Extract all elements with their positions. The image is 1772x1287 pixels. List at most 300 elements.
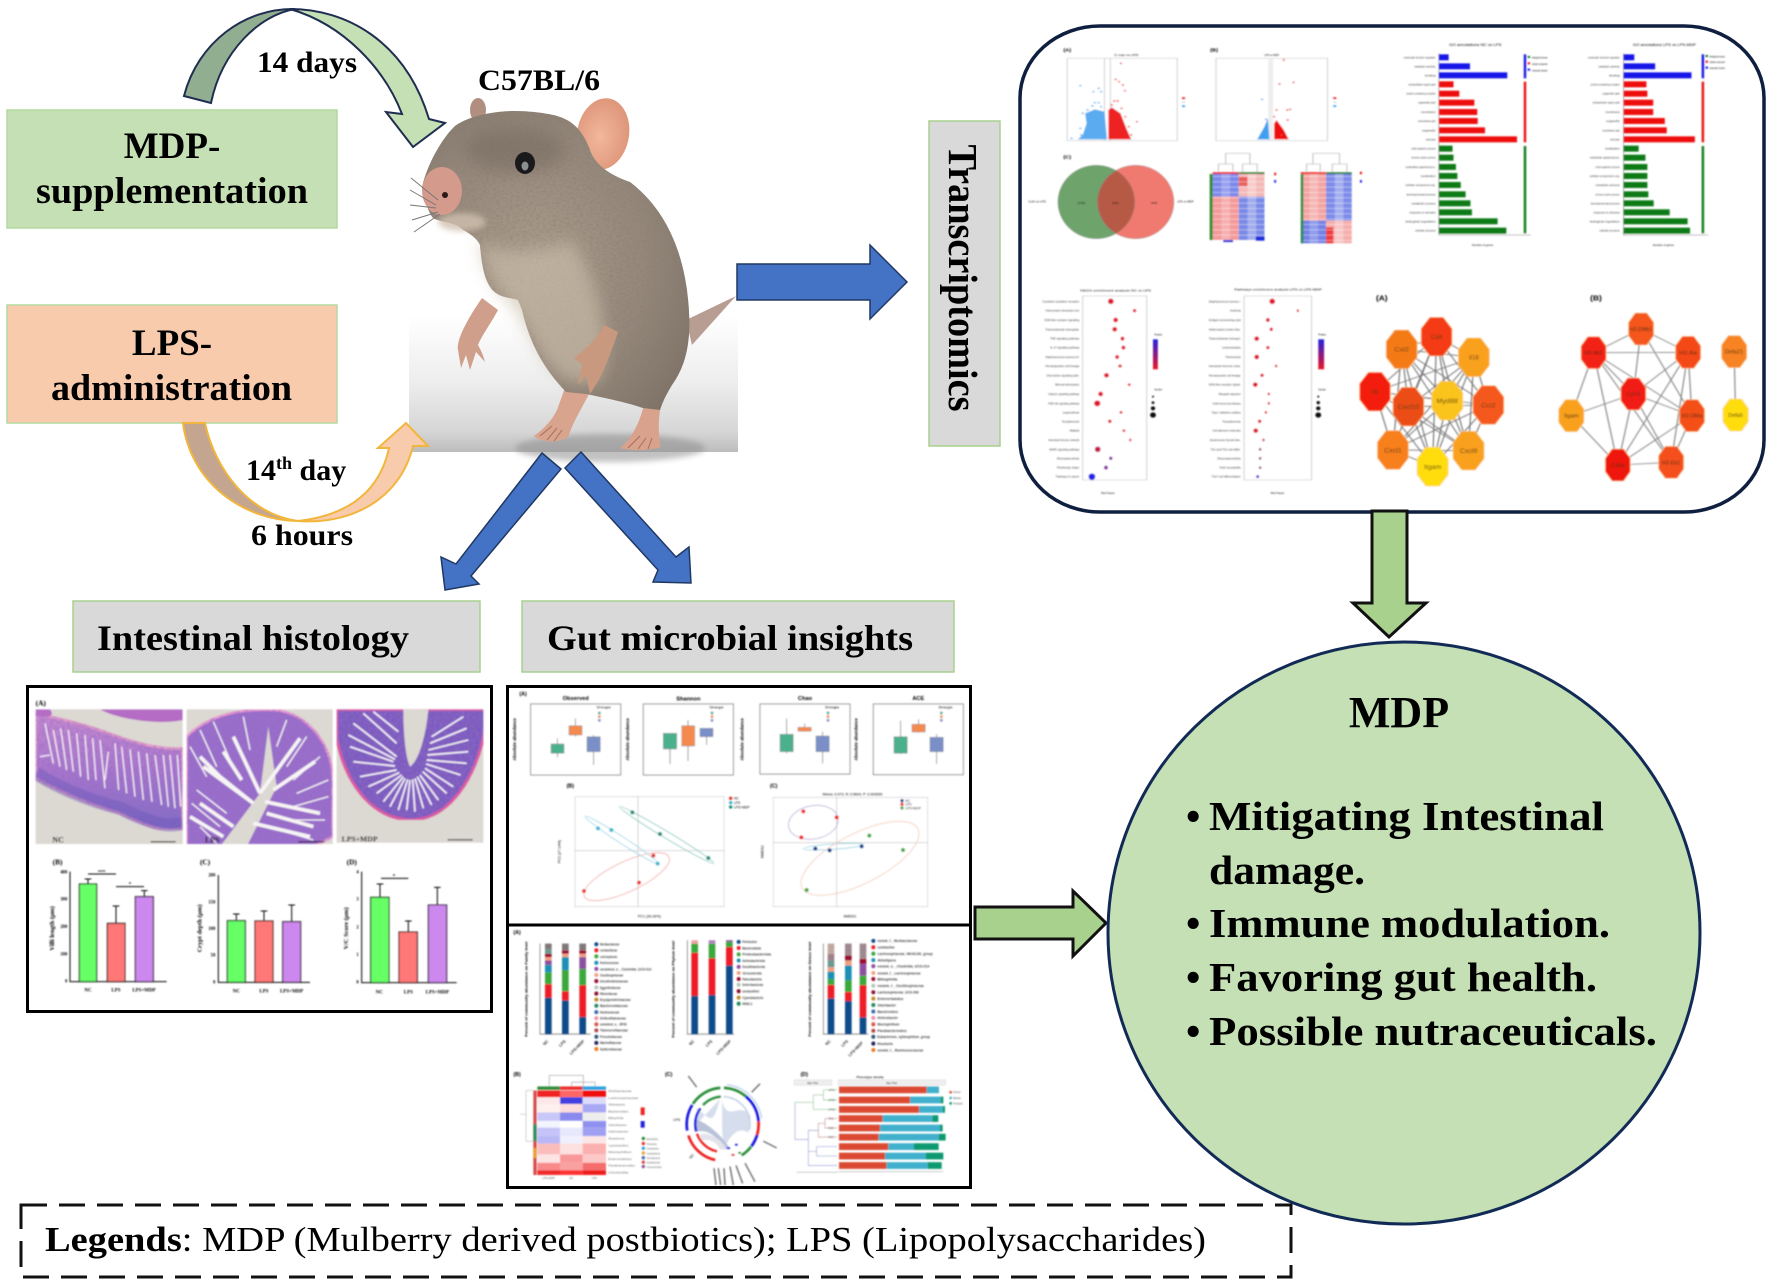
PCoA plot B: (B) (567, 783, 574, 789)
horizontal stacked bars D: Bar Plot (886, 1081, 897, 1085)
dot plot: KEGG enrichment NC vs LPS: Chemokine signaling path. (1046, 374, 1079, 377)
stacked bars: family level: Lactobacillaceae (600, 949, 617, 953)
box: Transcriptomics label: Transcriptomics (940, 144, 986, 412)
stacked bars: phylum level: Verrucomicrobia (742, 971, 762, 975)
box: LPS administration (7, 305, 337, 423)
heading box: Intestinal histology (73, 601, 480, 672)
dot plot: KEGG enrichment NC vs LPS: Staphylococcus aureus inf. (1045, 356, 1079, 359)
boxplot: Observed: Absolute abundance (512, 717, 517, 761)
bar chart: villi length: NC (84, 989, 92, 994)
network A: hub genes: Myd88 (1437, 397, 1458, 405)
volcano plot B: (B) (1210, 48, 1218, 53)
stacked bars: genus level: Percent of community abundance on Genus level (807, 942, 812, 1037)
bar chart: V/C score: LPS (404, 990, 413, 995)
bar chart: crypt depth (196, 857, 310, 994)
panel: transcriptomics results: cellular component (1532, 63, 1548, 66)
dot plot: KEGG enrichment NC vs LPS: Viral protein interaction w/c (1045, 309, 1080, 312)
bar chart: GO annotations NC vs LPS: cellular component org. (1406, 184, 1436, 187)
bar chart: GO annotations NC vs LPS: developmental process (1406, 193, 1436, 196)
dot plot: Pathway enrichment LPS vs LPS-MDP: Allograft rejection (1218, 393, 1241, 396)
boxplot: ACE (853, 696, 963, 775)
stacked bars: family level: unranked_o__RF39 (600, 1023, 627, 1027)
stacked bars: phylum level: Percent of community abundance on Phylum level (670, 941, 675, 1038)
bar chart: GO annotations NC vs LPS: GO annotations NC vs LPS (1449, 43, 1502, 47)
dot plot: Pathway enrichment LPS vs LPS-MDP: Intestinal immune netw. (1209, 365, 1241, 368)
bar chart: GO annotations NC vs LPS: response to stimulus (1409, 211, 1436, 214)
bar chart: GO annotations LPS vs LPS-MDP: immune system process (1596, 193, 1620, 196)
horizontal stacked bars D: Firmic. (953, 1090, 962, 1094)
stacked bars: phylum level: Bacteroidota (742, 946, 762, 950)
heading: MDP: MDP (1349, 688, 1449, 737)
network B: hub genes: (B) (1590, 294, 1602, 302)
stacked bars: phylum level: LPS (704, 1038, 714, 1048)
stacked bars: phylum level: Proteobacteriota (742, 953, 772, 957)
conclusion list: • (1186, 900, 1200, 946)
bar chart: GO annotations NC vs LPS: binding (1425, 74, 1436, 77)
stacked bars: family level: Bacteroidaceae (600, 1004, 628, 1008)
heatmap B: taxa (513, 1072, 662, 1180)
heatmap B: taxa: Cyanobacteria (647, 1151, 660, 1155)
bar chart: crypt depth: 150 (208, 900, 216, 905)
arrow: mouse to gut microbial insights (565, 452, 691, 583)
dot plot: Pathway enrichment LPS vs LPS-MDP: Cell adhesion molecules (1213, 429, 1241, 432)
arrow: transcriptomics to MDP conclusions (1353, 511, 1426, 637)
bar chart: GO annotations LPS vs LPS-MDP: biological process (1709, 55, 1725, 58)
PCoA plot B: NC (734, 797, 739, 801)
network B: hub genes: Itgam (1564, 414, 1579, 419)
bar chart: GO annotations NC vs LPS: localization (1421, 175, 1436, 178)
bar chart: GO annotations LPS vs LPS-MDP: Number of genes (1653, 244, 1674, 247)
bar chart: GO annotations LPS vs LPS-MDP: extracellular region part (1593, 101, 1620, 104)
venn diagram (1028, 155, 1194, 239)
stacked bars: genus level: NC (824, 1039, 832, 1046)
stacked bars: family level: Rikenellaceae (600, 992, 617, 996)
stacked bars: family level: LPS+MDP (568, 1038, 586, 1056)
panel: gut microbial results: (A) (513, 930, 521, 936)
bar chart: villi length: LPS (111, 989, 121, 994)
bar chart: villi length: 400 (60, 870, 68, 875)
bar chart: GO annotations LPS vs LPS-MDP: molecular function (1709, 67, 1725, 70)
horizontal stacked bars D: Bacter. (953, 1096, 962, 1100)
network A: hub genes: Il18 (1469, 353, 1479, 361)
stacked bars: genus level: Mucispirillum (877, 1023, 900, 1027)
dot plot: KEGG enrichment NC vs LPS: Pathways in cancer (1056, 475, 1080, 478)
bar chart: crypt depth: LPS+MDP (280, 989, 303, 994)
PCoA plot C: LPS+MDP (905, 806, 922, 810)
bar chart: villi length: 100 (60, 952, 68, 957)
bar chart: GO annotations NC vs LPS: catalytic activity (1414, 65, 1436, 68)
boxplot: Observed (512, 696, 621, 775)
bar chart: GO annotations LPS vs LPS-MDP: multicellular organismal proc. (1590, 156, 1620, 159)
dot plot: KEGG enrichment NC vs LPS: Cytokine-cytokine receptor (1042, 300, 1080, 303)
stacked bars: genus level: Enterorhabdus (877, 997, 903, 1001)
horizontal stacked bars D: LPS3 (828, 1107, 835, 1111)
stacked bars: genus level (807, 939, 933, 1058)
dot plot: KEGG enrichment NC vs LPS: Intestinal immune network (1048, 439, 1080, 442)
stacked bars: family level: Lachnospiraceae (600, 955, 617, 959)
heatmap B: taxa: Lachnospiraceae (608, 1096, 639, 1100)
micrograph: LPS+MDP (337, 709, 485, 843)
boxplot: Chao (739, 696, 850, 774)
micrograph: LPS+MDP: LPS+MDP (342, 834, 378, 843)
boxplot: Shannon: Groups (709, 705, 724, 710)
stacked bars: genus level: norank_f__Muribaculaceae (877, 939, 917, 943)
network B: hub genes: Ciita (1611, 463, 1625, 469)
PCoA plot C (760, 783, 929, 918)
curved arrow: LPS administration to mouse (183, 423, 428, 521)
bar chart: GO annotations NC vs LPS: immune system process (1411, 156, 1436, 159)
stacked bars: phylum level: Patescibacteria (742, 977, 762, 981)
bar chart: villi length: *** (98, 870, 106, 875)
heatmap B: taxa: Bacteroidota (647, 1137, 658, 1141)
boxplot: Observed: Observed (563, 696, 589, 702)
bar chart: GO annotations LPS vs LPS-MDP: cellular process (1599, 229, 1620, 232)
stacked bars: phylum level: Deferribacterota (742, 983, 764, 987)
bar chart: GO annotations NC vs LPS: organelle (1422, 129, 1436, 132)
dot plot: Pathway enrichment LPS vs LPS-MDP: Leishmaniasis (1222, 346, 1241, 349)
stacked bars: genus level: Eubacterium_xylanophilum_group (877, 1035, 931, 1039)
bar chart: GO annotations NC vs LPS (1404, 43, 1548, 247)
stacked bars: genus level: LPS (840, 1038, 849, 1048)
bar chart: V/C score: * (393, 874, 396, 879)
heatmap B: taxa: Actinobacteria (647, 1156, 660, 1160)
stacked bars: phylum level (670, 940, 772, 1056)
micrograph: LPS (187, 709, 333, 847)
heatmap B: taxa: Desulfobacterota (647, 1160, 660, 1164)
stacked bars: genus level: Parabacteroides (877, 1029, 907, 1033)
dot plot: Pathway enrichment LPS vs LPS-MDP: Autoimmune thyroid dise. (1210, 439, 1241, 442)
PCoA plot B: LPS+MDP (734, 805, 750, 809)
stacked bars: family level: Nostocaceae (600, 1010, 619, 1015)
horizontal stacked bars D: Proteob. (953, 1101, 964, 1105)
heatmap B: taxa: Bilophila (608, 1116, 624, 1120)
bar chart: GO annotations LPS vs LPS-MDP: response to stimulus (1594, 211, 1620, 214)
PCoA plot C: NMDS1 (844, 914, 856, 918)
stacked bars: genus level: Odoribacter (877, 1003, 896, 1007)
dot plot: Pathway enrichment LPS vs LPS-MDP: Toxoplasmosis (1222, 420, 1241, 423)
horizontal stacked bars D: (D) (801, 1072, 808, 1078)
PCoA plot B: LPS (734, 801, 741, 805)
stacked bars: phylum level: Actinobacteriota (742, 959, 766, 963)
bar chart: crypt depth: 100 (208, 927, 216, 932)
dot plot: KEGG enrichment NC vs LPS: Malaria (1070, 429, 1079, 432)
network A: hub genes: Il6 (1372, 388, 1379, 396)
label: 14 days: 14 days (257, 46, 357, 79)
bar chart: GO annotations NC vs LPS: molecular function (1532, 69, 1548, 72)
PCoA plot C: Stress: 0.073, R: 0.5643, P: 0.003000 (822, 792, 882, 796)
bar chart: V/C score (343, 857, 457, 995)
bar chart: V/C score: LPS+MDP (426, 990, 449, 995)
bar chart: GO annotations LPS vs LPS-MDP: binding (1609, 74, 1620, 77)
bar chart: villi length: 200 (60, 925, 68, 930)
dot plot: KEGG enrichment NC vs LPS: PI3K-Akt signaling pathway (1048, 402, 1080, 405)
stacked bars: phylum level: Desulfobacterota (742, 965, 766, 969)
conclusion list: • (1186, 1008, 1200, 1054)
chord diagram C: NC (689, 1153, 695, 1160)
bar chart: GO annotations LPS vs LPS-MDP (1588, 43, 1725, 247)
network A: hub genes: Cd4 (1431, 333, 1443, 341)
dot plot: Pathway enrichment LPS vs LPS-MDP: Pvalue (1318, 333, 1326, 336)
micrograph: NC (36, 709, 183, 845)
bar chart: V/C score: 2 (356, 925, 359, 930)
bar chart: GO annotations NC vs LPS: protein-containing complex (1406, 92, 1436, 95)
bar chart: crypt depth: (C) (200, 857, 211, 866)
volcano plot A: C-mpt vs LPS (1114, 54, 1139, 57)
panel: transcriptomics results (1020, 26, 1764, 512)
dot plot: KEGG enrichment NC vs LPS: Pvalue (1154, 333, 1162, 336)
bar chart: GO annotations NC vs LPS: organelle part (1418, 101, 1436, 104)
bar chart: V/C score: 4 (356, 870, 359, 875)
heatmap B: taxa: Alistipes (608, 1103, 626, 1107)
bar chart: GO annotations NC vs LPS: membrane part (1418, 120, 1436, 123)
stacked bars: family level: Percent of community abundance on Family level (523, 942, 528, 1037)
dot plot: Pathway enrichment LPS vs LPS-MDP: Th17 cell differentiation (1212, 475, 1241, 478)
bar chart: crypt depth: 200 (208, 874, 216, 879)
heading box: Gut microbial insights (522, 601, 954, 672)
heatmap B: taxa: Proteobacteria (647, 1147, 659, 1151)
dot plot: KEGG enrichment NC vs LPS: Rich Factor (1101, 492, 1115, 495)
venn diagram: 2160 (1077, 202, 1085, 205)
bar chart: GO annotations NC vs LPS: molecular function regulator (1404, 56, 1436, 59)
network A: hub genes: Cxcl10 (1398, 403, 1419, 411)
bar chart: GO annotations LPS vs LPS-MDP: biological regulation (1590, 220, 1620, 223)
stacked bars: genus level: Helicobacter (877, 1016, 899, 1020)
bar chart: crypt depth: LPS (259, 989, 269, 994)
chord diagram C: LPS (673, 1118, 681, 1122)
heatmap B: taxa: Enterorhabdus (608, 1157, 633, 1161)
dot plot: KEGG enrichment NC vs LPS: Hematopoietic cell lineage (1045, 365, 1079, 368)
box: MDP supplementation: MDP- (124, 126, 220, 167)
dot plot: KEGG enrichment NC vs LPS: NOD-like receptor signaling (1044, 319, 1079, 322)
stacked bars: genus level: Lactobacillus (877, 946, 895, 950)
dot plot: KEGG enrichment NC vs LPS: Number (1154, 388, 1163, 391)
network B: hub genes: Defa5 (1728, 413, 1743, 419)
stacked bars: genus level: Bacteroides (877, 1010, 898, 1014)
box: Transcriptomics label (929, 121, 1000, 446)
horizontal stacked bars D: NC2 (828, 1126, 834, 1130)
stacked bars: family level: unranked_o__Clostridia_UCG-014 (600, 967, 652, 971)
PCoA plot B: PC2 (27.14%) (558, 840, 562, 863)
bar chart: GO annotations LPS vs LPS-MDP: organelle (1606, 120, 1620, 123)
heatmap B: taxa: Mucispirillum (608, 1150, 633, 1154)
stacked bars: phylum level: Cyanobacteria (742, 996, 764, 1000)
micrograph: NC: NC (52, 836, 64, 845)
horizontal stacked bars D: NC3 (828, 1135, 834, 1139)
volcano plot B: LPS vs MDP (1264, 54, 1279, 57)
horizontal stacked bars D: NC1 (828, 1117, 834, 1121)
legend box (21, 1205, 1291, 1277)
boxplot: ACE: ACE (912, 696, 925, 702)
stacked bars: family level: Marinifilaceae (600, 1041, 621, 1045)
boxplot: Chao: Absolute abundance (739, 717, 744, 761)
bar chart: GO annotations LPS vs LPS-MDP: membrane part (1602, 129, 1620, 132)
bar chart: villi length (49, 857, 167, 994)
bar chart: GO annotations NC vs LPS: extracellular region part (1408, 83, 1436, 86)
bar chart: crypt depth: NC (233, 989, 240, 994)
boxplot: Observed: Groups (597, 705, 612, 710)
venn diagram: LPS vs MDP (1177, 200, 1194, 203)
heading box: Gut microbial insights: Gut microbial insights (547, 618, 913, 658)
stacked bars: family level: Muribaculaceae (600, 943, 619, 947)
bar chart: GO annotations NC vs LPS: multi-organism process (1411, 147, 1436, 150)
bar chart: GO annotations LPS vs LPS-MDP: localization (1605, 147, 1620, 150)
bar chart: GO annotations LPS vs LPS-MDP: cellular component org. (1590, 175, 1620, 178)
PCoA plot C: NMDS2 (760, 845, 764, 858)
dot plot: KEGG enrichment NC vs LPS: Phototherapy, antigen (1057, 466, 1079, 469)
stacked bars: family level: Erysipelotrichaceae (600, 998, 631, 1002)
conclusion list: Mitigating Intestinal (1209, 793, 1604, 839)
dot plot: KEGG enrichment NC vs LPS (1042, 289, 1163, 495)
stacked bars: family level: Oscillospiraceae (600, 973, 623, 977)
network B: hub genes: Cd74 (1627, 392, 1640, 398)
dot plot: Pathway enrichment LPS vs LPS-MDP: Viral myocarditis (1219, 466, 1241, 469)
dot plot: Pathway enrichment LPS vs LPS-MDP: Number (1318, 388, 1327, 391)
heading box: Intestinal histology: Intestinal histology (97, 618, 409, 658)
dot plot: KEGG enrichment NC vs LPS: Transcriptional misregulat. (1045, 328, 1079, 331)
micrograph: LPS: LPS (205, 836, 220, 845)
stacked bars: phylum level: NC (688, 1039, 695, 1046)
bar chart: GO annotations NC vs LPS: multicellular organismal proc. (1406, 166, 1436, 169)
panel: intestinal histology results: (A) (36, 699, 46, 708)
stacked bars: genus level: Lachnospiraceae_NK4A136_group (877, 952, 933, 956)
curved arrow: 14 days supplementation (184, 9, 445, 147)
stacked bars: phylum level: unclassified (742, 990, 760, 994)
network B: hub genes: H2-DMb1 (1630, 327, 1652, 333)
boxplot: Chao: Chao (798, 696, 813, 702)
network A: hub genes: Itgam (1424, 463, 1441, 471)
bar chart: villi length: 0 (65, 980, 68, 985)
bar chart: villi length: 300 (60, 898, 68, 903)
network A: hub genes (1359, 294, 1504, 486)
horizontal stacked bars D: Phenotype density (856, 1076, 884, 1080)
bar chart: GO annotations LPS vs LPS-MDP: metabolic process (1596, 184, 1620, 187)
bar chart: crypt depth: 0 (213, 980, 216, 985)
boxplot: Chao: Groups (825, 705, 840, 710)
conclusion list: • (1186, 793, 1200, 839)
conclusion list: • (1186, 954, 1200, 1000)
dot plot: Pathway enrichment LPS vs LPS-MDP: Inflammatory bowel dise. (1209, 328, 1241, 331)
dot plot: KEGG enrichment NC vs LPS: TNF signaling pathway (1050, 337, 1080, 340)
bar chart: V/C score: NC (376, 990, 383, 995)
stacked bars: genus level: Bilophila (877, 977, 899, 981)
bar chart: GO annotations NC vs LPS: metabolic process (1411, 202, 1436, 205)
network B: hub genes: H2-DMa (1682, 414, 1702, 419)
heatmap LPS vs MDP (1301, 153, 1362, 243)
bar chart: V/C score: (D) (347, 857, 357, 866)
volcano plot A (1063, 48, 1185, 141)
panel: intestinal histology results (28, 686, 492, 1012)
PCoA plot C: (C) (770, 783, 778, 789)
box: MDP supplementation: supplementation (36, 171, 308, 212)
network B: hub genes: Defa21 (1725, 350, 1743, 355)
network B: hub genes: H2-Eb1 (1662, 460, 1680, 466)
horizontal stacked bars D: LPS2 (828, 1098, 835, 1102)
bar chart: GO annotations NC vs LPS: membrane (1421, 111, 1436, 114)
panel: transcriptomics results: cellular component (1709, 61, 1725, 64)
horizontal stacked bars D: Bar Plot (807, 1081, 818, 1085)
boxplot: Shannon (625, 697, 733, 775)
heatmap B: taxa: Clostridia (608, 1170, 629, 1174)
dot plot: Pathway enrichment LPS vs LPS-MDP: Rheumatoid arthritis (1217, 457, 1241, 460)
venn diagram: 45 (1151, 202, 1157, 205)
label: 14th day: 14 (246, 454, 276, 487)
heatmap B: taxa: Parabacteroides (608, 1164, 636, 1168)
horizontal stacked bars D: LPS1 (828, 1088, 835, 1092)
dot plot: Pathway enrichment LPS vs LPS-MDP: Rich Factor (1271, 492, 1285, 495)
stacked bars: family level: Sutterellaceae (600, 1047, 622, 1051)
dot plot: Pathway enrichment LPS vs LPS-MDP: Hematopoietic cell lineage (1209, 374, 1241, 377)
stacked bars: family level: Eggerthellaceae (600, 986, 621, 990)
network B: hub genes (1559, 294, 1748, 481)
PCoA plot C: LPS (905, 803, 912, 807)
label: 14th day: th (276, 453, 292, 473)
boxplot: ACE: Absolute abundance (853, 717, 858, 761)
dot plot: Pathway enrichment LPS vs LPS-MDP: Th1 and Th2 cell differ. (1211, 448, 1241, 451)
boxplot: Shannon: Shannon (676, 697, 701, 703)
stacked bars: family level: Ruminococcaceae (600, 961, 619, 965)
bar chart: V/C score: 1 (356, 953, 359, 958)
bar chart: villi length: (B) (53, 857, 63, 866)
stacked bars: phylum level: NKB1-2 (742, 1002, 752, 1006)
stacked bars: family level: Prevotellaceae (600, 1035, 622, 1039)
stacked bars: genus level: norank_f__Ruminococcaceae (877, 1048, 923, 1052)
heatmap B: taxa: LPS+MDP (542, 1176, 555, 1180)
chord diagram C: (C) (665, 1072, 673, 1078)
heatmap NC vs LPS (1210, 153, 1276, 242)
venn diagram: (C) (1063, 155, 1071, 160)
dot plot: Pathway enrichment LPS vs LPS-MDP: Transcriptional misregul. (1209, 337, 1241, 340)
conclusion list: Immune modulation. (1209, 900, 1610, 946)
PCoA plot C: NC (905, 799, 911, 803)
dot plot: Pathway enrichment LPS vs LPS-MDP: Graft-versus-host disease (1213, 402, 1241, 405)
dot plot: Pathway enrichment LPS vs LPS-MDP: Pathways enrichment analysis LPS vs LPS-MDP (1234, 288, 1322, 291)
stacked bars: phylum level: Firmicutes (742, 940, 757, 944)
conclusion circle: MDP (1108, 642, 1700, 1224)
PCoA plot B (558, 783, 750, 918)
heatmap B: taxa: Lactobacillus (608, 1143, 629, 1147)
bar chart: GO annotations LPS vs LPS-MDP: multi-organism process (1596, 166, 1620, 169)
heatmap B: taxa: Roseburia (608, 1136, 625, 1141)
stacked bars: family level: Defluviitaleaceae (600, 1017, 626, 1021)
dot plot: Pathway enrichment LPS vs LPS-MDP: Antigen processing and (1209, 319, 1241, 322)
dot plot: Pathway enrichment LPS vs LPS-MDP: Asthma (1230, 309, 1241, 312)
bar chart: GO annotations NC vs LPS: cellular process (1415, 229, 1436, 232)
network A: hub genes: Cxcl1 (1384, 446, 1402, 454)
bar chart: V/C score: 3 (356, 898, 359, 903)
bar chart: GO annotations LPS vs LPS-MDP: molecular function regulator (1588, 56, 1620, 59)
network A: hub genes: Cxcl9 (1460, 447, 1478, 455)
dot plot: KEGG enrichment NC vs LPS: Mineral absorption (1055, 383, 1079, 386)
bar chart: GO annotations LPS vs LPS-MDP: cell part (1610, 138, 1620, 141)
bar chart: crypt depth: 50 (211, 954, 216, 959)
bar chart: GO annotations LPS vs LPS-MDP: protein-containing complex (1591, 83, 1620, 86)
heatmap B: taxa: (B) (513, 1072, 521, 1078)
heatmap B: taxa: Helicobacter (608, 1130, 628, 1134)
dot plot: KEGG enrichment NC vs LPS: Rheumatoid arthritis (1057, 457, 1080, 460)
dot plot: Pathway enrichment LPS vs LPS-MDP: Tuberculosis (1225, 356, 1241, 359)
bar chart: GO annotations NC vs LPS: cell part (1426, 138, 1436, 141)
stacked bars: phylum level: LPS+MDP (715, 1038, 732, 1056)
conclusion list (1186, 793, 1657, 1054)
arrow: gut microbial results to MDP conclusions (975, 891, 1106, 956)
dot plot: Pathway enrichment LPS vs LPS-MDP: Type I diabetes mellitus (1212, 411, 1241, 414)
arrow: mouse to intestinal histology (441, 453, 561, 590)
PCoA plot B: PC1 (34.16%) (638, 914, 661, 918)
heatmap B: taxa: Firmicutes (647, 1142, 657, 1146)
network A: hub genes: Ccl2 (1481, 401, 1496, 409)
heatmap B: taxa: LPS (592, 1176, 597, 1180)
box: MDP supplementation (7, 110, 337, 228)
